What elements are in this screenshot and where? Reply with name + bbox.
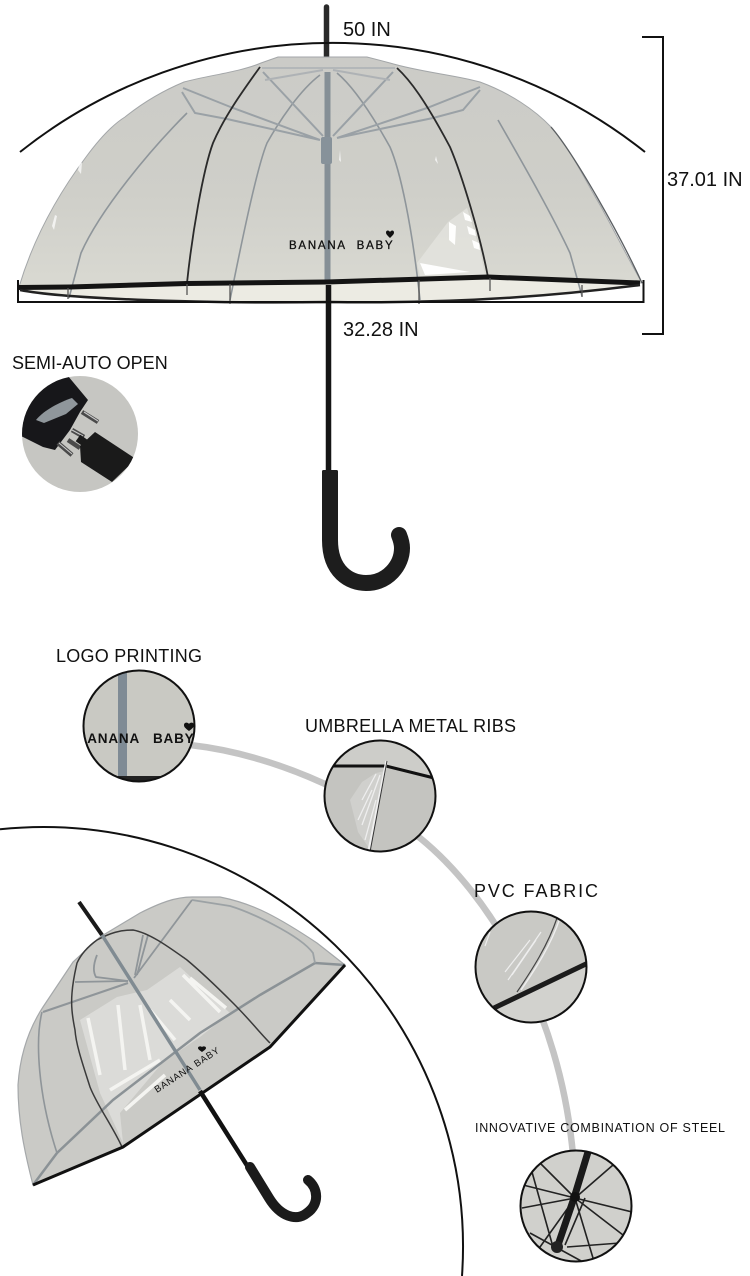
logo printing callout bbox=[56, 646, 202, 786]
detail fill bbox=[520, 1150, 632, 1262]
grip top bbox=[322, 470, 338, 490]
grey shaft through canopy bbox=[102, 935, 200, 1090]
dimension: width line bbox=[18, 280, 644, 341]
rim bbox=[33, 965, 345, 1185]
logo heart bbox=[198, 1046, 206, 1052]
label 32.28 IN: 32.28 IN bbox=[343, 319, 419, 341]
detail content: BABY bbox=[153, 731, 194, 746]
heading: UMBRELLA METAL RIBS bbox=[305, 716, 516, 736]
detail content bbox=[334, 742, 432, 850]
grey seam band bbox=[33, 963, 345, 1185]
circular detail bbox=[77, 668, 195, 786]
dimension: height bracket bbox=[642, 37, 743, 334]
detail fill bbox=[83, 670, 195, 782]
pvc fabric callout bbox=[474, 881, 598, 1030]
center shaft bbox=[324, 72, 330, 284]
detail content bbox=[522, 1152, 632, 1262]
heading: LOGO PRINTING bbox=[56, 646, 202, 666]
bracket line bbox=[642, 37, 663, 334]
width bracket bbox=[18, 280, 644, 302]
canopy highlights bbox=[52, 150, 485, 276]
logo heart bbox=[386, 231, 394, 238]
detail fill bbox=[475, 911, 587, 1023]
semi-auto open callout bbox=[12, 353, 168, 494]
label 37.01 IN: 37.01 IN bbox=[667, 169, 743, 191]
black rim bbox=[19, 277, 640, 288]
heading: PVC FABRIC bbox=[474, 881, 598, 901]
lower shaft bbox=[326, 285, 331, 472]
circular detail bbox=[520, 1150, 632, 1262]
angled umbrella bbox=[18, 897, 345, 1217]
front black rib bbox=[72, 930, 270, 1147]
white streaks bbox=[88, 975, 226, 1110]
detail content bbox=[85, 672, 194, 780]
circular detail bbox=[475, 911, 588, 1030]
detail fill bbox=[324, 740, 436, 852]
top ferrule bbox=[79, 902, 102, 935]
inner underside of canopy bbox=[20, 277, 640, 302]
logo bbox=[289, 231, 394, 252]
hook bbox=[330, 480, 402, 583]
canopy bbox=[18, 897, 345, 1185]
canopy highlight bbox=[80, 967, 230, 1143]
logo text: BANANA BABY bbox=[289, 240, 394, 252]
detail ring bbox=[324, 740, 436, 852]
label 50 IN: 50 IN bbox=[343, 19, 391, 41]
outer ribs bbox=[69, 73, 582, 300]
top ferrule bbox=[324, 7, 329, 62]
heading: SEMI-AUTO OPEN bbox=[12, 353, 168, 373]
front-view umbrella bbox=[19, 7, 642, 583]
innovative steel callout bbox=[475, 1121, 725, 1262]
sheen area bbox=[80, 967, 230, 1143]
rotated logo text: BANANA BABY bbox=[153, 1045, 222, 1096]
detail ring bbox=[520, 1150, 632, 1262]
rib tips bbox=[68, 278, 582, 304]
crook handle bbox=[250, 1167, 316, 1217]
detail content: BANANA bbox=[77, 731, 140, 746]
dimension: circumference arc bbox=[20, 19, 645, 152]
stretchers bbox=[182, 68, 480, 140]
circular photo of open button bbox=[20, 374, 140, 494]
large black framing arc bbox=[0, 827, 463, 1276]
detail ring bbox=[476, 912, 586, 1022]
runner bbox=[321, 137, 332, 164]
black front ribs bbox=[187, 67, 642, 283]
crook handle bbox=[322, 470, 402, 583]
grey connector arc bbox=[190, 745, 573, 1155]
detail content bbox=[485, 918, 588, 1030]
canopy bbox=[19, 57, 642, 287]
arc line bbox=[20, 43, 645, 152]
umbrella metal ribs callout bbox=[305, 716, 516, 852]
detail ring bbox=[84, 670, 194, 782]
right panel sheen bbox=[417, 208, 485, 276]
lower shaft bbox=[200, 1091, 248, 1167]
ribs bbox=[39, 900, 315, 1153]
heading: INNOVATIVE COMBINATION OF STEEL bbox=[475, 1121, 725, 1135]
lower rim bbox=[20, 285, 640, 302]
circular detail bbox=[324, 738, 436, 852]
